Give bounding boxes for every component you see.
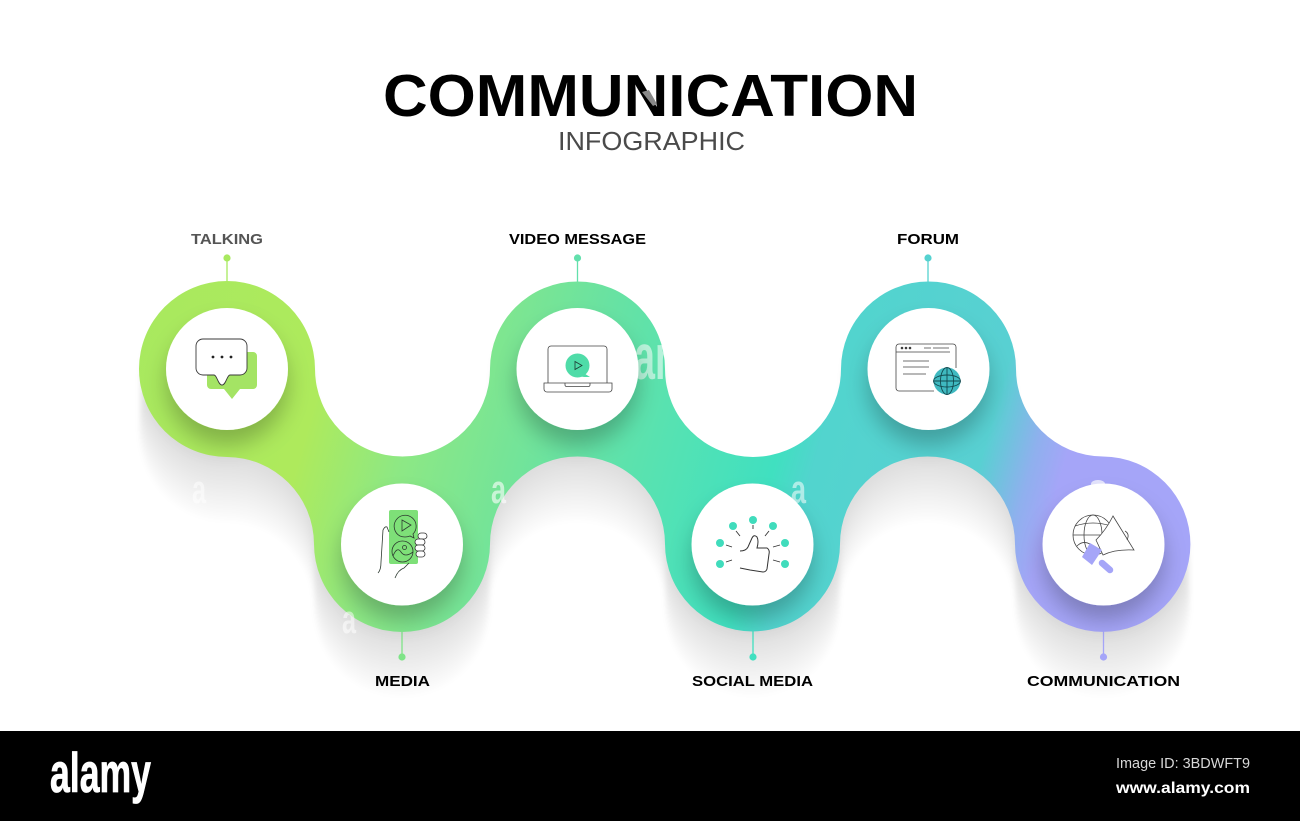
label: talking: TALKING bbox=[191, 231, 263, 248]
watermark fragments bbox=[192, 321, 1105, 642]
node: media bbox=[341, 484, 463, 606]
footer bar bbox=[0, 731, 1300, 821]
icon: speech bubbles bbox=[196, 339, 257, 399]
band cast shadow bbox=[139, 285, 1190, 696]
watermark fragments: a bbox=[791, 468, 807, 512]
node: talking bbox=[166, 308, 288, 430]
label: media: MEDIA bbox=[375, 673, 430, 690]
node: social media bbox=[692, 484, 814, 606]
subtitle: INFOGRAPHIC bbox=[558, 128, 745, 156]
icon: globe and megaphone bbox=[1073, 515, 1134, 570]
node: forum bbox=[868, 308, 990, 430]
footer logo: alamy bbox=[50, 741, 151, 804]
icon: hand holding phone bbox=[378, 510, 427, 578]
node: communication bbox=[1042, 484, 1164, 606]
watermark fragments: a bbox=[491, 468, 507, 512]
watermark fragments: an bbox=[634, 321, 678, 393]
label: video message: VIDEO MESSAGE bbox=[509, 231, 646, 248]
icon: thumbs up with nodes bbox=[716, 516, 789, 572]
label: communication: COMMUNICATION bbox=[1027, 673, 1180, 690]
watermark fragments: a bbox=[342, 598, 356, 642]
watermark fragments: a bbox=[192, 468, 206, 512]
connector: video message bbox=[574, 254, 581, 282]
connector: social media bbox=[749, 631, 757, 661]
label: forum: FORUM bbox=[897, 231, 959, 248]
icon: browser window with globe bbox=[896, 344, 960, 394]
icon: laptop with play bubble bbox=[544, 346, 612, 392]
connector: forum bbox=[924, 254, 932, 282]
connector: talking bbox=[223, 254, 231, 282]
title: COMMUNICATION bbox=[383, 63, 918, 129]
connector: media bbox=[398, 631, 406, 661]
connector: communication bbox=[1100, 631, 1107, 661]
label: social media: SOCIAL MEDIA bbox=[692, 673, 813, 690]
node: video message bbox=[516, 308, 638, 430]
image id: Image ID: 3BDWFT9 bbox=[1116, 755, 1250, 772]
website: www.alamy.com bbox=[1115, 780, 1250, 797]
gradient wave band bbox=[139, 281, 1190, 632]
